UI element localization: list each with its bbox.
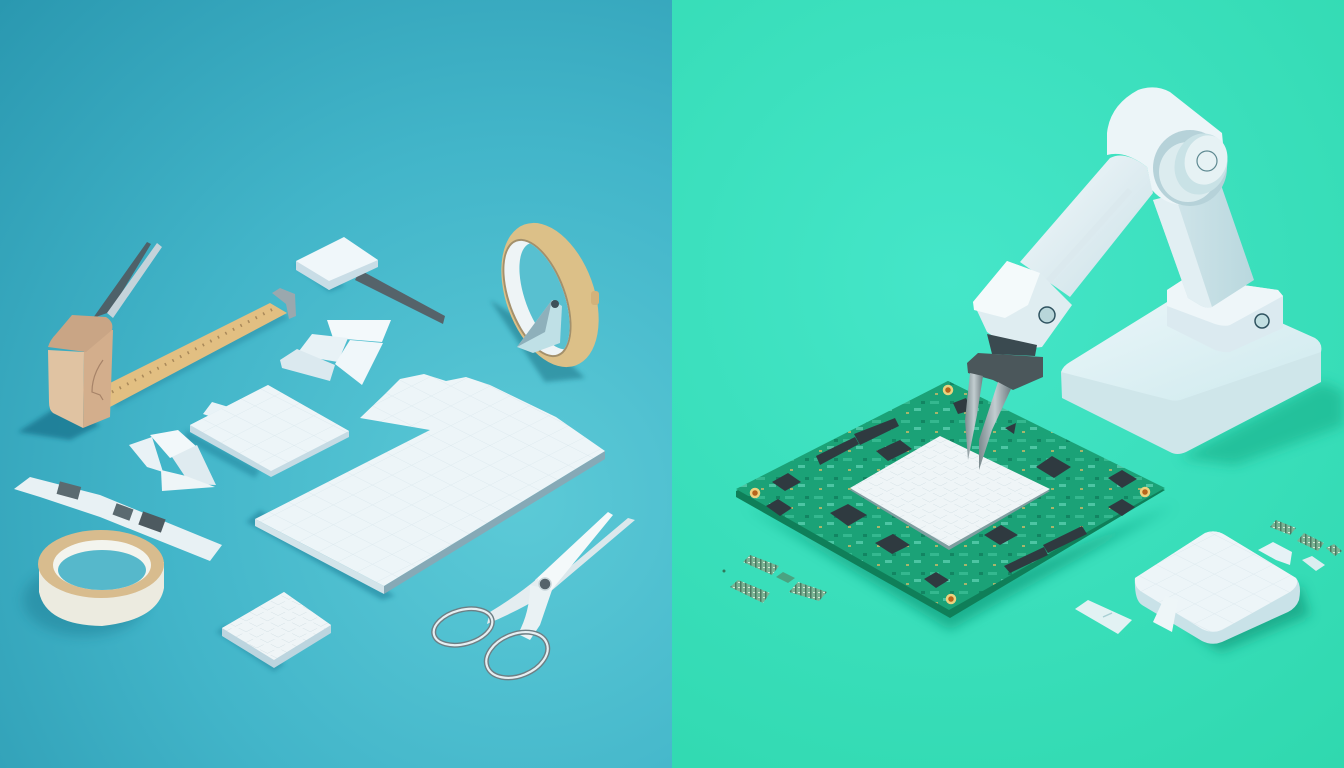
- robot base: [1061, 347, 1321, 454]
- icon: loose components: [722, 520, 1342, 603]
- robot pedestal: [1167, 277, 1283, 352]
- panel: manual tools: [14, 209, 635, 686]
- icon: scissors: [430, 512, 635, 686]
- icon: large thermal pad: [246, 374, 605, 600]
- icon: medium thermal pad: [185, 385, 349, 478]
- icon: tape measure: [18, 242, 296, 440]
- icon: tape roll with blade: [492, 222, 599, 384]
- thermal pad on chip: [850, 438, 1050, 550]
- shoulder joint: [1107, 87, 1225, 205]
- icon: pad with pull tab: [1135, 531, 1310, 652]
- icon: circuit board: [736, 381, 1175, 630]
- panel: left background: [0, 0, 672, 768]
- icon: robot arm: [965, 87, 1344, 470]
- upper arm: [1153, 182, 1254, 308]
- panel: right background: [672, 0, 1344, 768]
- icon: paper scraps: [129, 430, 216, 491]
- icon: small square pad: [216, 592, 331, 672]
- icon: strip with residue: [14, 477, 222, 561]
- gripper: [987, 334, 1037, 356]
- icon: small pad with handle: [294, 237, 445, 324]
- icon: loose film strip: [1075, 600, 1132, 634]
- icon: small tape roll: [23, 530, 164, 636]
- wrist housing: [973, 261, 1072, 350]
- panel: robotic placement: [722, 87, 1344, 652]
- forearm: [1020, 155, 1153, 297]
- icon: cut pad pieces: [280, 320, 391, 385]
